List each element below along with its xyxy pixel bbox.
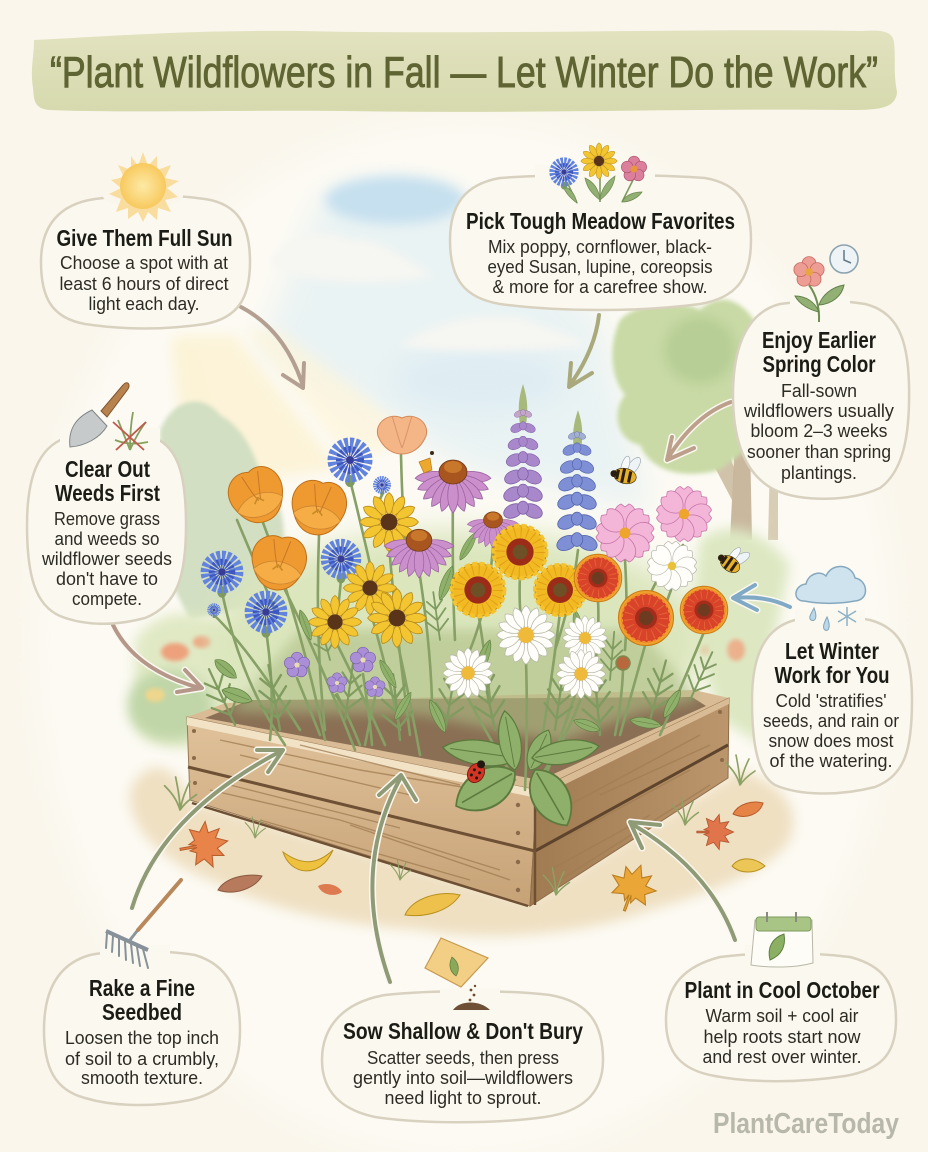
ground tufts and fallen leaves (165, 755, 765, 919)
arrow: winter (733, 585, 790, 610)
sky wash (260, 176, 650, 510)
text: earlier spring color (743, 327, 895, 483)
wildflower heads (208, 416, 728, 709)
title banner (32, 30, 897, 112)
text: clear out weeds: Remove grass (54, 508, 160, 529)
left bush (160, 401, 284, 620)
panel: clear out weeds (27, 383, 186, 624)
bees (419, 451, 754, 578)
text: full sun (56, 225, 232, 314)
text: earlier spring color: Fall-sown (781, 380, 857, 401)
text: earlier spring color: plantings. (781, 462, 857, 483)
lower-left foliage (128, 614, 745, 748)
arrow: full sun (241, 307, 304, 388)
panel: plant in cool october (666, 912, 896, 1081)
ground (130, 768, 794, 936)
text: clear out weeds: don't have to (56, 568, 158, 589)
text: let winter work: Let Winter (785, 638, 879, 664)
text: full sun: Choose a spot with at (60, 252, 228, 273)
text: let winter work: seeds, and rain or (763, 710, 899, 731)
stems (214, 455, 704, 790)
feathery sprigs (196, 591, 723, 742)
text: plant in cool october: Plant in Cool October (684, 977, 880, 1003)
text: clear out weeds: wildflower seeds (41, 548, 172, 569)
text: clear out weeds: and weeds so (54, 528, 160, 549)
text: full sun: Give Them Full Sun (56, 225, 232, 251)
text: sow shallow (343, 1018, 583, 1108)
icon: seed packet (425, 938, 500, 1010)
text: clear out weeds: Weeds First (55, 480, 160, 506)
icon: trowel and weeds (60, 383, 160, 450)
text: let winter work: Work for You (774, 662, 890, 688)
icon: calendar (745, 912, 820, 967)
icon: sun (103, 152, 183, 222)
arrow: sow (372, 775, 416, 982)
text: plant in cool october: Warm soil + cool air (706, 1005, 858, 1026)
panel: let winter work (752, 566, 912, 794)
garden scene (128, 176, 794, 936)
text: rake a fine seedbed: Rake a Fine (89, 975, 195, 1001)
ladybug (464, 757, 490, 786)
right foliage (690, 529, 790, 760)
text: meadow favorites: Pick Tough Meadow Favorites (466, 208, 735, 234)
text: clear out weeds (41, 456, 172, 609)
text: sow shallow: Sow Shallow & Don't Bury (343, 1018, 583, 1044)
text: meadow favorites (466, 208, 735, 297)
foliage wash over the soil (230, 630, 700, 742)
panel: earlier spring color (733, 245, 909, 499)
clouds (270, 233, 590, 351)
icon: three flowers (535, 136, 655, 203)
text: clear out weeds: compete. (72, 588, 142, 609)
foliage (211, 530, 684, 835)
text: meadow favorites: & more for a carefree show. (492, 276, 708, 297)
arrow: spring color (667, 402, 731, 460)
raised wooden bed (187, 690, 729, 906)
sun rays (170, 330, 420, 480)
text: full sun: light each day. (88, 293, 200, 314)
text: meadow favorites: Mix poppy, cornflower, black- (488, 236, 712, 257)
text: earlier spring color: wildflowers usually (743, 400, 895, 421)
lupine spires (501, 384, 600, 554)
panel: sow shallow (322, 938, 603, 1122)
text: earlier spring color: bloom 2–3 weeks (750, 420, 888, 441)
text: let winter work: Cold 'stratifies' (776, 690, 886, 711)
text: rake a fine seedbed: of soil to a crumbly, (65, 1048, 219, 1069)
tree (612, 300, 778, 540)
text: full sun: least 6 hours of direct (60, 273, 228, 294)
text: rake a fine seedbed (65, 975, 219, 1088)
arrow: clear weeds (113, 625, 202, 692)
text: rake a fine seedbed: Seedbed (102, 999, 182, 1025)
text: rake a fine seedbed: Loosen the top inch (65, 1027, 219, 1048)
text: plant in cool october: help roots start now (704, 1026, 861, 1047)
text: meadow favorites: eyed Susan, lupine, coreopsis (488, 256, 712, 277)
text: rake a fine seedbed: smooth texture. (81, 1067, 203, 1088)
text: let winter work: snow does most (768, 730, 894, 751)
text: plant in cool october: and rest over winter. (702, 1046, 862, 1067)
arrow: rake (132, 750, 283, 908)
text: earlier spring color: Spring Color (762, 351, 876, 377)
text: sow shallow: gently into soil—wildflowers (353, 1067, 573, 1088)
icon: rake (100, 880, 181, 968)
panel: rake a fine seedbed (44, 880, 240, 1105)
arrow: plant (630, 822, 735, 940)
icon: cloud with rain and snow (795, 566, 866, 630)
text: let winter work: of the watering. (770, 750, 892, 771)
panel: give them full sun (41, 152, 250, 328)
text: sow shallow: Scatter seeds, then press (367, 1047, 559, 1068)
text: clear out weeds: Clear Out (65, 456, 150, 482)
text: plant in cool october (684, 977, 880, 1067)
icon: flower and clock (790, 245, 858, 322)
panel: meadow favorites (450, 136, 751, 310)
text: let winter work (763, 638, 899, 771)
arrow: meadow favorites (569, 315, 599, 387)
text: earlier spring color: sooner than spring (747, 441, 891, 462)
logo text: PlantCareToday (713, 1108, 899, 1140)
text: sow shallow: need light to sprout. (384, 1087, 542, 1108)
pale meadow wash behind flowers (210, 530, 710, 750)
text: earlier spring color: Enjoy Earlier (762, 327, 876, 353)
